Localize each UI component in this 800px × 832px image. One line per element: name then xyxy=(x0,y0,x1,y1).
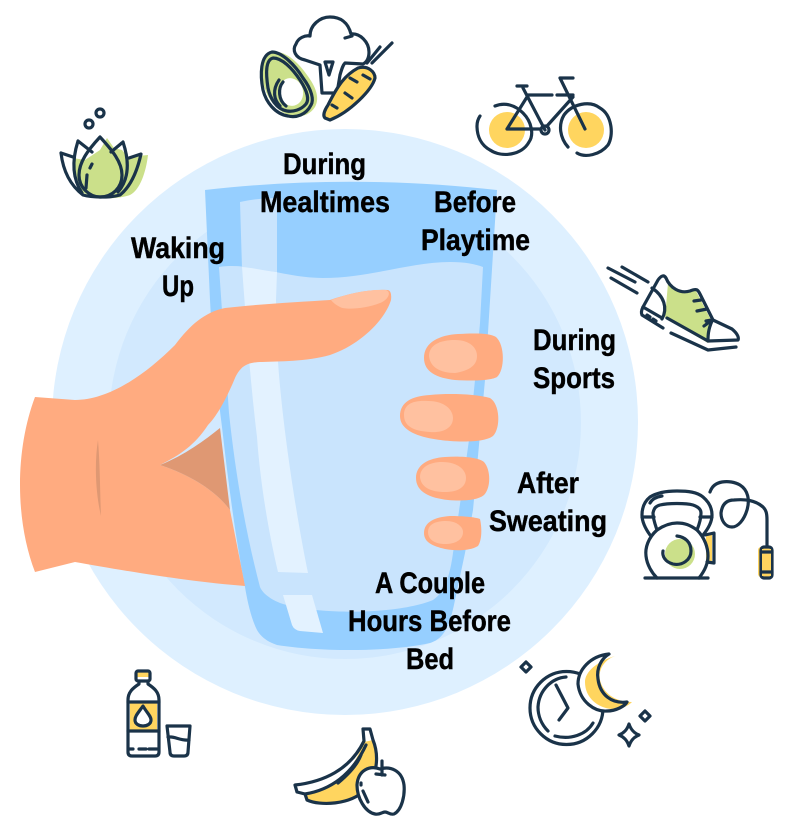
finger 3 xyxy=(416,457,489,500)
icon: water bottle and glass xyxy=(128,671,190,756)
label: during sports: During xyxy=(533,324,616,357)
label: during sports: Sports xyxy=(533,362,615,395)
icon: kettlebell and jump rope xyxy=(642,482,772,578)
label: before playtime: Before xyxy=(434,186,516,219)
label: a couple hours before bed: Hours Before xyxy=(348,605,511,638)
icon: bicycle xyxy=(477,78,611,155)
drinking glass xyxy=(205,182,497,650)
label: during sports xyxy=(533,324,616,395)
icon: running shoe xyxy=(608,267,738,350)
glass highlight in water xyxy=(242,267,308,573)
label: waking up: Waking xyxy=(131,232,225,265)
label: during mealtimes xyxy=(260,148,390,219)
label: before playtime xyxy=(421,186,530,257)
label: during mealtimes: Mealtimes xyxy=(260,186,390,219)
palm crease shadow xyxy=(160,428,230,510)
icon: avocado broccoli carrot xyxy=(261,17,392,120)
label: waking up xyxy=(131,232,225,303)
label: after sweating: After xyxy=(517,467,579,500)
inner background circle xyxy=(109,187,581,659)
water xyxy=(219,262,483,612)
glass highlight above water xyxy=(240,198,277,272)
label: during mealtimes: During xyxy=(283,148,366,181)
nail xyxy=(404,401,453,432)
label: a couple hours before bed xyxy=(348,567,511,676)
label: waking up: Up xyxy=(162,270,194,303)
icon: bananas and apple xyxy=(295,729,404,814)
outer background circle xyxy=(52,129,638,715)
icon: lotus xyxy=(61,109,148,198)
label: before playtime: Playtime xyxy=(421,224,530,257)
icon: clock and moon xyxy=(521,654,650,746)
hand xyxy=(20,290,391,586)
wrist crease xyxy=(96,440,101,516)
finger 1 xyxy=(424,333,503,381)
label: after sweating xyxy=(489,467,607,538)
finger 2 xyxy=(400,394,498,441)
label: a couple hours before bed: Bed xyxy=(406,643,454,676)
nail xyxy=(429,340,477,373)
label: after sweating: Sweating xyxy=(489,505,607,538)
finger 4 xyxy=(424,516,481,550)
nail xyxy=(428,521,463,544)
thumb nail xyxy=(331,290,389,309)
nail xyxy=(420,462,466,492)
label: a couple hours before bed: A Couple xyxy=(375,567,485,600)
glass lower highlight xyxy=(283,595,323,633)
